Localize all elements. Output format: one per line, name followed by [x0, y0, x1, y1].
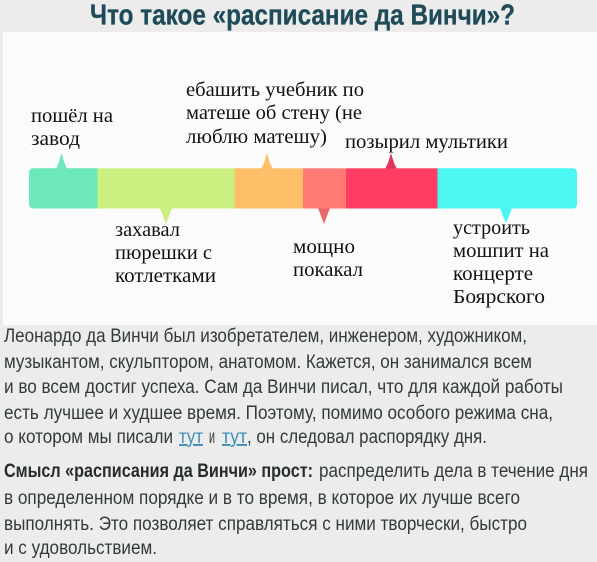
- label: ебашить учебник: матеше об стену (не: [186, 102, 362, 124]
- label: устроить мошпит: устроить: [453, 217, 530, 239]
- label: пошёл на завод: [31, 105, 113, 150]
- label: мощно покакал: покакал: [293, 259, 363, 281]
- label: захавал пюрешки: [115, 219, 216, 287]
- label: мощно покакал: мощно: [293, 236, 355, 258]
- label: ебашить учебник: люблю матешу): [186, 126, 327, 148]
- label: захавал пюрешки: котлетками: [115, 265, 216, 287]
- label: мощно покакал: [293, 236, 363, 281]
- text block: second paragraph: Смысл «расписания да Винчи» прост:: [4, 461, 313, 482]
- text block: first paragraph: и: [209, 427, 215, 448]
- label: ебашить учебник: [186, 79, 364, 148]
- panel: chart background: [3, 32, 597, 325]
- label: устроить мошпит: [453, 217, 549, 308]
- label: захавал пюрешки: захавал: [115, 219, 180, 241]
- label: ебашить учебник: ебашить учебник по: [186, 79, 364, 101]
- title: Что такое «расписание да Винчи»?: [90, 0, 515, 32]
- label: позырил мультики: позырил мультики: [345, 131, 508, 153]
- text block: first paragraph: о котором мы писали: [4, 427, 173, 448]
- label: пошёл на завод: пошёл на: [31, 105, 113, 127]
- text block: second paragraph: и с удовольствием.: [4, 538, 157, 559]
- label: устроить мошпит: мошпит на: [453, 240, 549, 262]
- segment pointers: [56, 153, 512, 224]
- text block: first paragraph: тут: [222, 427, 247, 448]
- text block: second paragraph: [4, 461, 588, 559]
- label: устроить мошпит: концерте: [453, 263, 533, 285]
- text block: first paragraph: , он следовал распорядку дня.: [247, 427, 487, 448]
- bar segments: [29, 168, 577, 208]
- text block: second paragraph: в определенном порядке и в то время, в которое их лучше всего: [4, 488, 520, 509]
- label: устроить мошпит: Боярского: [453, 286, 545, 308]
- text block: first paragraph: [4, 326, 563, 448]
- text block: first paragraph: тут: [179, 427, 203, 448]
- text block: first paragraph: музыкантом, скульптором, анатомом. Кажется, он занимался всем: [4, 352, 532, 373]
- text block: first paragraph: Леонардо да Винчи был изобретателем, инженером, художником,: [4, 326, 527, 347]
- timeline bar: [29, 153, 577, 224]
- text block: second paragraph: выполнять. Это позволяет справляться с ними творчески, быстро: [4, 514, 527, 535]
- label: захавал пюрешки: пюрешки с: [115, 242, 212, 264]
- text block: first paragraph: есть лучшее и худшее время. Поэтому, помимо особого режима сна,: [4, 403, 553, 424]
- label: пошёл на завод: завод: [31, 128, 80, 150]
